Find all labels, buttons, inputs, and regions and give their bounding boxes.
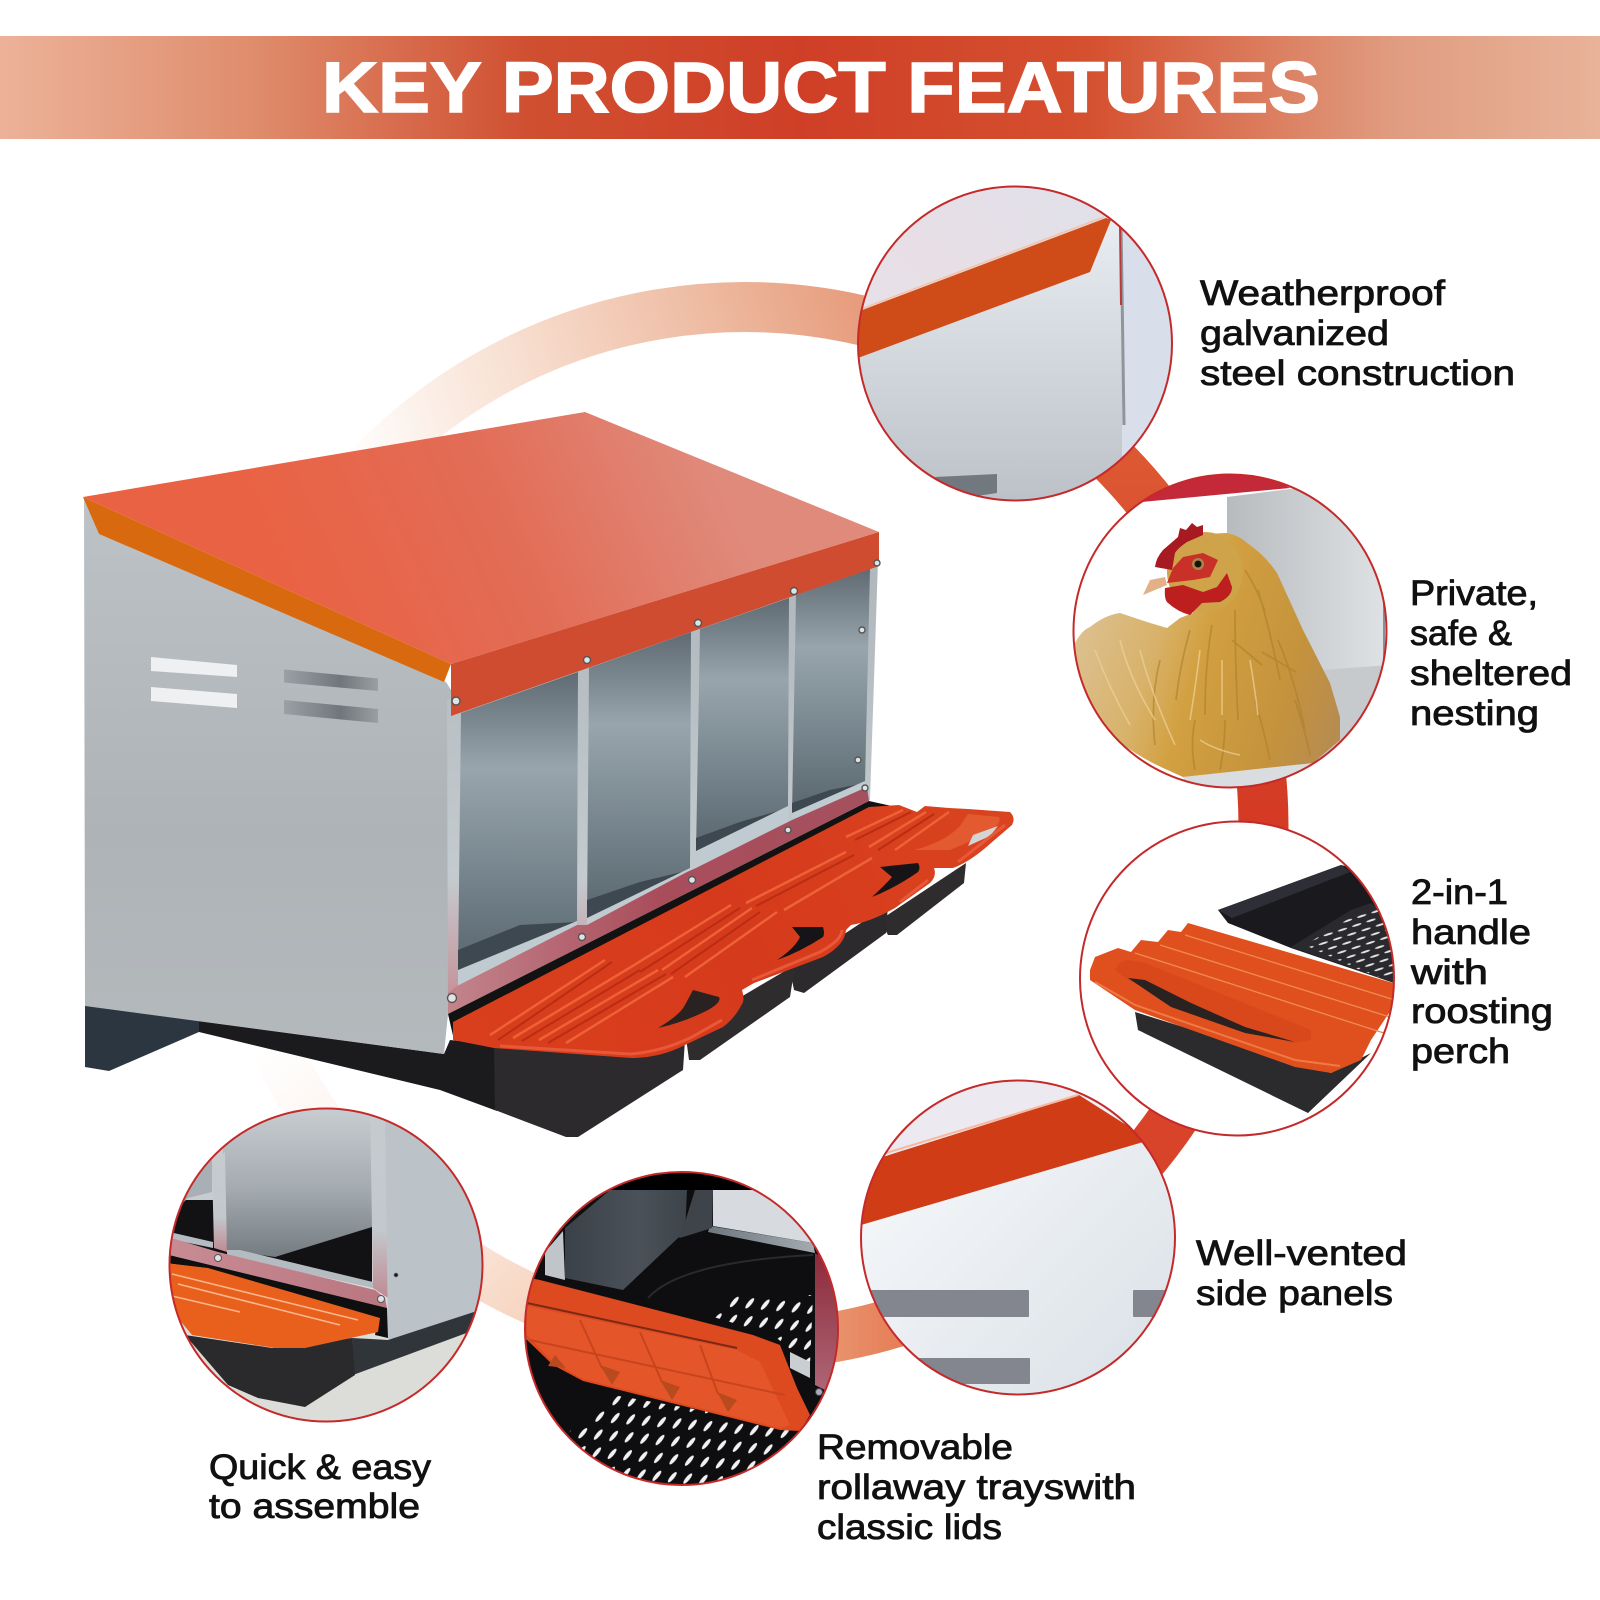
orange lid bbox=[1090, 923, 1400, 1073]
hen eye bbox=[1192, 558, 1204, 570]
perforations bbox=[1308, 910, 1393, 980]
text: private nesting: Private, bbox=[1410, 574, 1538, 613]
hen body bbox=[1075, 533, 1340, 777]
connector ring bbox=[270, 307, 1263, 1345]
lid rib lines bbox=[530, 1320, 785, 1395]
tray curve bbox=[648, 1255, 813, 1298]
tray 2 bbox=[685, 965, 795, 1060]
lid lower panel bbox=[527, 1306, 790, 1428]
steel band bbox=[708, 1226, 815, 1253]
roof top bbox=[885, 1082, 1079, 1156]
callout: removable trays bbox=[520, 1165, 845, 1495]
side panel bbox=[84, 498, 451, 1054]
lid ridges bbox=[172, 1274, 358, 1325]
handle slot highlight bbox=[1115, 960, 1311, 1043]
tray 1 bbox=[494, 1040, 685, 1137]
dark wall bbox=[565, 1190, 687, 1290]
text: private nesting: sheltered bbox=[1410, 654, 1572, 693]
vents bbox=[151, 657, 378, 723]
bolt bbox=[816, 1388, 822, 1396]
text: removable trays: classic lids bbox=[817, 1508, 1002, 1547]
black gap bbox=[165, 1254, 388, 1338]
light panel bbox=[713, 1190, 813, 1243]
tray 3 bbox=[790, 905, 888, 993]
text: weatherproof: galvanized bbox=[1200, 314, 1389, 353]
handle hole 3 bbox=[872, 863, 920, 897]
text: weatherproof: Weatherproof bbox=[1200, 274, 1445, 313]
text: handle: perch bbox=[1411, 1032, 1510, 1071]
lid ribs bbox=[548, 1355, 737, 1412]
roof orange edge bbox=[83, 497, 451, 682]
light sliver bbox=[545, 1231, 565, 1280]
orange band bbox=[855, 1095, 1150, 1226]
text: removable trays: Removable bbox=[817, 1428, 1013, 1467]
sill main bbox=[227, 1250, 373, 1288]
text: well vented: side panels bbox=[1196, 1274, 1393, 1313]
bolts bbox=[214, 1254, 398, 1302]
text: handle bbox=[1410, 873, 1553, 1071]
tray 4 bbox=[880, 863, 966, 935]
orange lid bbox=[165, 1263, 380, 1348]
handle hole 1 bbox=[658, 990, 720, 1028]
tray lids with handles bbox=[453, 805, 1014, 1058]
back wall bbox=[1227, 489, 1390, 672]
text: quick assembly bbox=[209, 1448, 432, 1526]
callout: easy assembly bbox=[165, 1105, 490, 1430]
tray interior bbox=[1218, 865, 1400, 985]
black gap bbox=[448, 801, 892, 1040]
compartment sills bbox=[458, 781, 865, 986]
text: private nesting bbox=[1410, 574, 1572, 733]
header banner bbox=[0, 36, 1600, 139]
handle hole 4 opening bbox=[968, 826, 998, 846]
vent slot bbox=[935, 474, 997, 496]
callout: handle with perch bbox=[1075, 815, 1400, 1140]
text: handle: with bbox=[1410, 953, 1488, 992]
callout: side vents bbox=[855, 1075, 1185, 1405]
post bbox=[680, 1190, 713, 1238]
posts bbox=[212, 1105, 388, 1298]
upper light area bbox=[165, 1105, 490, 1235]
text: private nesting: nesting bbox=[1410, 694, 1539, 733]
handle highlight bbox=[500, 825, 1005, 1054]
hen feathers bbox=[1153, 570, 1310, 770]
red hinge bbox=[1120, 225, 1121, 305]
product: nesting box bbox=[83, 412, 1014, 1137]
handle hole 2 bbox=[777, 927, 824, 960]
pink rail bbox=[448, 787, 869, 1014]
top cap bbox=[520, 1165, 845, 1190]
text: removable trays bbox=[817, 1428, 1136, 1547]
lid ridges bbox=[490, 810, 949, 1043]
text: quick assembly: to assemble bbox=[209, 1487, 420, 1526]
text: removable trays: rollaway trayswith bbox=[817, 1468, 1136, 1507]
lid ridges bbox=[1135, 935, 1395, 1035]
text: weatherproof: steel construction bbox=[1200, 354, 1515, 393]
right strip bbox=[1122, 232, 1171, 456]
pink strip bbox=[815, 1253, 845, 1400]
shelf bbox=[1183, 764, 1311, 786]
orange roof band bbox=[850, 218, 1111, 362]
handle slot bbox=[1128, 978, 1295, 1042]
steel panel bbox=[850, 220, 1122, 510]
upper perforated floor bbox=[707, 1295, 813, 1365]
hen beak bbox=[1143, 577, 1167, 595]
highlight bbox=[861, 217, 1104, 309]
text: private nesting: safe & bbox=[1410, 614, 1512, 653]
hen head bbox=[1167, 532, 1243, 612]
base bracket bbox=[85, 1005, 199, 1071]
text: handle: 2-in-1 bbox=[1411, 873, 1508, 912]
text: quick assembly: Quick & easy bbox=[209, 1448, 432, 1487]
wall floor bbox=[1300, 666, 1382, 764]
bolts bbox=[448, 560, 880, 1002]
seam line bbox=[1121, 222, 1124, 425]
title: KEY PRODUCT FEATURES bbox=[322, 49, 1320, 128]
nesting compartments bbox=[458, 569, 870, 972]
tray body bbox=[1135, 1012, 1371, 1113]
hen comb bbox=[1155, 523, 1203, 570]
left wall bbox=[165, 1105, 212, 1215]
hen wattle bbox=[1165, 573, 1232, 615]
lid silhouette bbox=[453, 805, 1014, 1058]
black base bbox=[199, 1021, 500, 1111]
roof top bbox=[83, 412, 879, 664]
red roof edge bbox=[1143, 476, 1290, 502]
bay wall bbox=[223, 1105, 372, 1257]
back base bbox=[352, 1310, 480, 1375]
sill left bbox=[165, 1231, 213, 1248]
front frame bbox=[447, 560, 878, 1014]
orange lid bbox=[524, 1278, 810, 1431]
black interior bbox=[170, 1200, 372, 1285]
tray body bbox=[185, 1335, 355, 1407]
light sliver right bbox=[790, 1352, 810, 1378]
highlight bbox=[886, 1095, 1078, 1153]
lid front highlight bbox=[1095, 982, 1340, 1066]
callout: hen nesting bbox=[1070, 465, 1390, 800]
wall edge line bbox=[1383, 604, 1385, 658]
side panel bbox=[385, 1105, 490, 1340]
vent slots bbox=[865, 1290, 1178, 1384]
hen face bbox=[1167, 553, 1218, 583]
handle hole 4 bbox=[914, 814, 1000, 850]
text: handle: roosting bbox=[1411, 992, 1553, 1031]
ridge shadows bbox=[498, 812, 934, 1043]
roof front lip bbox=[451, 532, 879, 716]
callout: galvanized steel detail bbox=[850, 180, 1180, 510]
perforated plate bbox=[1291, 903, 1400, 985]
text: handle: handle bbox=[1411, 913, 1531, 952]
lower perforated floor bbox=[560, 1395, 803, 1495]
lid gap bbox=[527, 1303, 737, 1348]
pink rail bbox=[165, 1236, 387, 1308]
text: well vented: Well-vented bbox=[1196, 1234, 1407, 1273]
back rail bbox=[1218, 865, 1350, 918]
hen light feathers bbox=[1095, 640, 1258, 755]
text: well vented bbox=[1196, 1234, 1407, 1313]
text: weatherproof bbox=[1200, 274, 1515, 393]
compartment floors bbox=[458, 783, 865, 972]
